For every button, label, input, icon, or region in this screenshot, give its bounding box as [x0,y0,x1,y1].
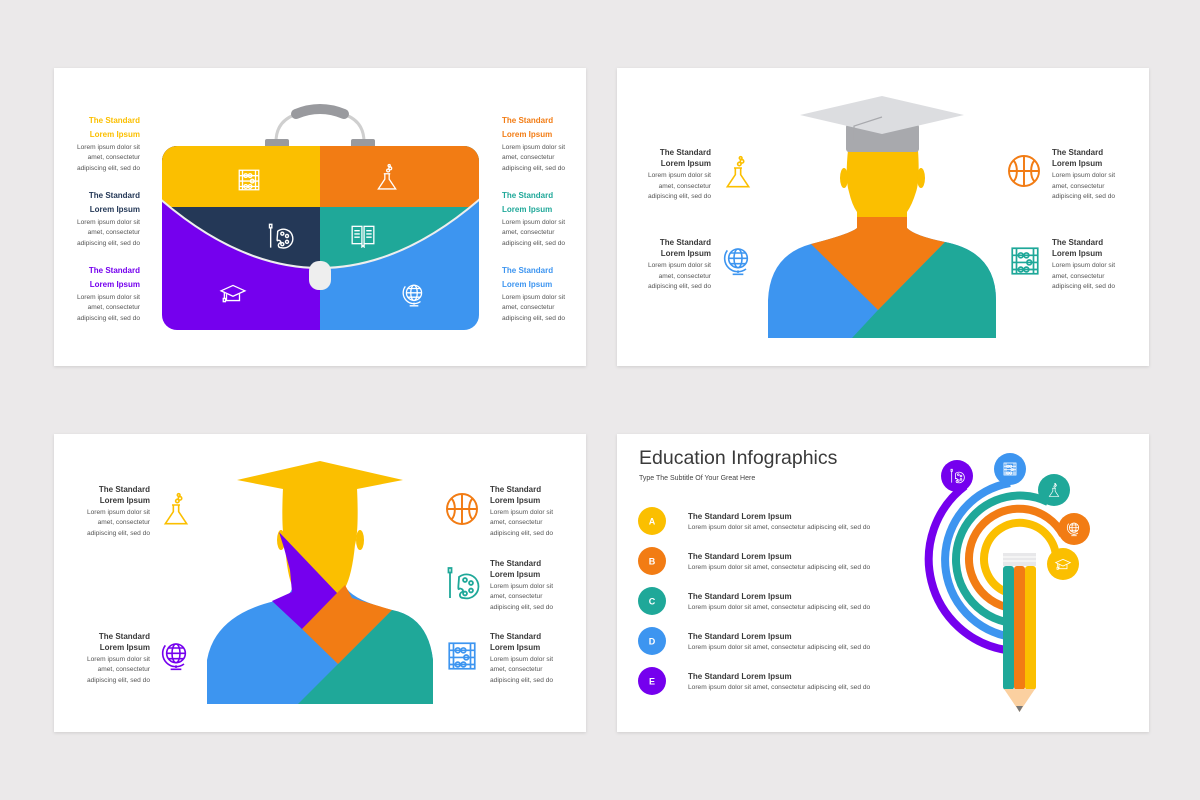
icon: graduation cap [221,285,245,302]
list items A-E: Lorem ipsum dolor sit amet, consectetur adipiscing elit, sed do [688,684,870,691]
list items A-E: C [649,596,656,606]
icon: basketball [1009,156,1039,186]
text: left blocks: The Standard [660,148,711,157]
icon: flask [727,157,749,187]
text: left blocks: Lorem ipsum dolor sit [87,509,150,516]
text: right blocks: adipiscing elit, sed do [1052,283,1115,290]
text: right blocks: Lorem Ipsum [490,570,540,579]
text: right blocks: amet, consectetur [490,593,543,600]
text: left blocks: Lorem Ipsum [661,249,711,258]
text: right blocks: Lorem ipsum dolor sit [1052,262,1115,269]
list items A-E: Lorem ipsum dolor sit amet, consectetur adipiscing elit, sed do [688,524,870,531]
list items A-E: The Standard Lorem Ipsum [688,552,792,561]
text: right blocks: The Standard [1052,238,1103,247]
text: left blocks: adipiscing elit, sed do [77,315,140,322]
list items A-E: Lorem ipsum dolor sit amet, consectetur adipiscing elit, sed do [688,644,870,651]
text: left blocks [77,116,141,322]
text: right blocks: amet, consectetur [1052,183,1105,190]
text: left blocks: Lorem Ipsum [661,159,711,168]
text: right blocks: The Standard [502,266,553,275]
text: right blocks: Lorem ipsum dolor sit [502,294,565,301]
list items A-E: A [649,516,656,526]
text: right blocks [1052,148,1115,290]
text: right blocks [502,116,565,322]
text: left blocks [87,485,151,684]
graduate figure [200,461,440,710]
text: left blocks: Lorem Ipsum [100,496,150,505]
text: right blocks: Lorem ipsum dolor sit [1052,172,1115,179]
text: left blocks: Lorem ipsum dolor sit [648,262,711,269]
icon: flask [378,165,396,189]
text: right blocks: amet, consectetur [1052,273,1105,280]
text: left blocks: adipiscing elit, sed do [77,165,140,172]
text: left blocks: Lorem Ipsum [90,205,140,214]
list items A-E: The Standard Lorem Ipsum [688,512,792,521]
text: right blocks: adipiscing elit, sed do [502,165,565,172]
icon circles [941,460,973,492]
icon: flask [165,494,187,524]
text: right blocks: Lorem Ipsum [502,205,552,214]
text: right blocks: Lorem Ipsum [490,643,540,652]
text: right blocks: adipiscing elit, sed do [490,530,553,537]
text: right blocks: Lorem Ipsum [502,130,552,139]
text: left blocks: Lorem ipsum dolor sit [77,219,140,226]
text: left blocks: The Standard [89,191,140,200]
panel: briefcase [54,68,586,366]
text: right blocks: Lorem ipsum dolor sit [502,219,565,226]
text: right blocks: The Standard [502,191,553,200]
text: left blocks: amet, consectetur [88,229,141,236]
text: right blocks: The Standard [490,559,541,568]
text: right blocks: Lorem Ipsum [1052,249,1102,258]
text: left blocks: amet, consectetur [98,519,151,526]
text: left blocks: Lorem ipsum dolor sit [77,144,140,151]
list items A-E: B [649,556,656,566]
text: right blocks: adipiscing elit, sed do [490,677,553,684]
briefcase handle [265,109,375,148]
text: right blocks: Lorem Ipsum [1052,159,1102,168]
icon: book [352,226,374,247]
panel: graduate with gray cap [617,68,1149,366]
text: left blocks: amet, consectetur [88,304,141,311]
text: left blocks: amet, consectetur [98,666,151,673]
text: left blocks: The Standard [89,266,140,275]
list items A-E [638,507,870,695]
text: right blocks: amet, consectetur [490,666,543,673]
icon: basketball [447,494,477,524]
text: left blocks: adipiscing elit, sed do [648,283,711,290]
text: left blocks: The Standard [99,632,150,641]
icon: palette [270,224,293,248]
text: left blocks: adipiscing elit, sed do [77,240,140,247]
text: right blocks: The Standard [490,632,541,641]
text: left blocks [648,148,712,290]
icon: abacus [1012,248,1038,274]
icon: palette [448,568,478,598]
text: left blocks: amet, consectetur [659,273,712,280]
text: right blocks: The Standard [1052,148,1103,157]
text: right blocks: Lorem ipsum dolor sit [490,583,553,590]
icon: abacus [449,643,475,669]
text: right blocks: Lorem ipsum dolor sit [490,656,553,663]
text: right blocks: adipiscing elit, sed do [490,604,553,611]
icon: globe [163,644,185,669]
text: right blocks: amet, consectetur [502,304,555,311]
title: Education Infographics [639,447,838,469]
list items A-E: D [649,636,656,646]
text: right blocks: amet, consectetur [490,519,543,526]
list items A-E: Lorem ipsum dolor sit amet, consectetur adipiscing elit, sed do [688,604,870,611]
text: right blocks: The Standard [490,485,541,494]
text: right blocks: amet, consectetur [502,154,555,161]
pencil chart with arcs [929,453,1090,712]
list items A-E: E [649,676,655,686]
text: left blocks: Lorem ipsum dolor sit [87,656,150,663]
graduate figure [760,96,1000,340]
text: right blocks: adipiscing elit, sed do [502,240,565,247]
list items A-E: The Standard Lorem Ipsum [688,672,792,681]
text: left blocks: The Standard [660,238,711,247]
text: left blocks: amet, consectetur [88,154,141,161]
text: right blocks [490,485,553,684]
text: right blocks: adipiscing elit, sed do [502,315,565,322]
text: right blocks: amet, consectetur [502,229,555,236]
text: right blocks: adipiscing elit, sed do [1052,193,1115,200]
text: left blocks: Lorem Ipsum [90,130,140,139]
panel: education infographics [617,434,1149,732]
text: right blocks: Lorem Ipsum [502,280,552,289]
icon: abacus [239,170,259,190]
text: left blocks: Lorem Ipsum [90,280,140,289]
list items A-E: Lorem ipsum dolor sit amet, consectetur adipiscing elit, sed do [688,564,870,571]
clasp [309,261,331,290]
briefcase body [162,146,479,330]
text: right blocks: Lorem Ipsum [490,496,540,505]
list items A-E: The Standard Lorem Ipsum [688,592,792,601]
text: left blocks: The Standard [89,116,140,125]
icon: globe [725,249,747,274]
text: right blocks: Lorem ipsum dolor sit [490,509,553,516]
icon: globe [403,285,422,306]
text: left blocks: adipiscing elit, sed do [648,193,711,200]
text: left blocks: adipiscing elit, sed do [87,677,150,684]
text: left blocks: adipiscing elit, sed do [87,530,150,537]
subtitle: Type The Subtitle Of Your Great Here [639,475,755,482]
text: left blocks: Lorem ipsum dolor sit [648,172,711,179]
text: left blocks: Lorem ipsum dolor sit [77,294,140,301]
panel: graduate with yellow cap [54,434,586,732]
text: left blocks: amet, consectetur [659,183,712,190]
list items A-E: The Standard Lorem Ipsum [688,632,792,641]
text: left blocks: Lorem Ipsum [100,643,150,652]
text: left blocks: The Standard [99,485,150,494]
text: right blocks: The Standard [502,116,553,125]
text: right blocks: Lorem ipsum dolor sit [502,144,565,151]
